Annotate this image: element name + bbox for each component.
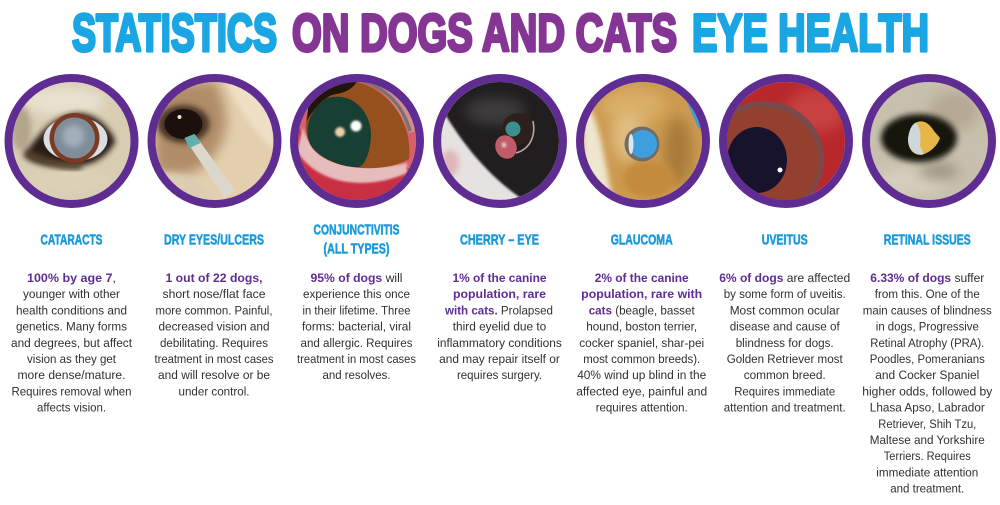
photo: retinal issues eye [866, 78, 992, 204]
text: retinal issues description: in dogs, Progressive [876, 320, 979, 334]
text: dry eyes description: more common. Painful, [156, 303, 272, 317]
text: retinal issues description: Terriers. Requires [884, 449, 971, 463]
column: dry eyes [154, 232, 274, 398]
title [72, 4, 929, 63]
text: cherry eye description: third eyelid due to [453, 320, 546, 334]
text: uveitus description: common breed. [744, 368, 826, 382]
heading: uveitus: UVEITUS [762, 232, 808, 248]
text: cataracts description: affects vision. [37, 401, 106, 415]
text: cataracts description: health conditions and [16, 303, 127, 317]
heading: conjunctivitis: (ALL TYPES) [324, 242, 390, 258]
text: conjunctivitis description: and resolves. [322, 368, 390, 382]
text: uveitus description: disease and cause of [730, 320, 840, 334]
text: glaucoma description: cocker spaniel, shar-pei [579, 336, 704, 350]
text: retinal issues description: Retinal Atrophy (PRA). [870, 336, 984, 350]
text: retinal issues description: higher odds, followed by [862, 384, 993, 398]
text: conjunctivitis description: and allergic. Requires [300, 336, 412, 350]
text: cataracts description: 100% by age 7, [27, 271, 116, 285]
text: cherry eye description: inflammatory conditions [437, 336, 562, 350]
photo: glaucoma eye [580, 78, 706, 204]
text: dry eyes description [154, 271, 274, 398]
text: glaucoma description: cats (beagle, basset [589, 303, 695, 317]
text: cherry eye description: requires surgery. [457, 368, 542, 382]
text: uveitus description: blindness for dogs. [736, 336, 834, 350]
text: dry eyes description: debilitating. Requires [160, 336, 268, 350]
text: retinal issues description: Maltese and Yorkshire [870, 433, 985, 447]
text: cataracts description: more dense/mature. [18, 368, 126, 382]
text: dry eyes description: decreased vision and [158, 320, 270, 334]
text: uveitus description: Golden Retriever most [727, 352, 843, 366]
title: STATISTICS [72, 4, 277, 63]
heading: cherry eye: CHERRY – EYE [460, 232, 539, 248]
photo: uveitis eye [719, 74, 853, 208]
text: glaucoma description: 40% wind up blind in the [577, 368, 706, 382]
text: cherry eye description: with cats. Prolapsed [444, 303, 553, 317]
text: cataracts description: Requires removal when [12, 384, 132, 398]
text: retinal issues description: immediate attention [876, 465, 978, 479]
column: glaucoma [576, 232, 707, 415]
photo: cherry eye [437, 78, 563, 204]
text: cataracts description: and degrees, but affect [11, 336, 133, 350]
heading: cataracts: CATARACTS [40, 232, 103, 248]
text: cataracts description: genetics. Many forms [16, 320, 127, 334]
heading: conjunctivitis [314, 222, 400, 258]
text: dry eyes description: short nose/flat face [162, 287, 266, 301]
text: cherry eye description: population, rare [453, 287, 546, 301]
heading: conjunctivitis: CONJUNCTIVITIS [314, 222, 400, 238]
column: conjunctivitis [297, 222, 416, 382]
text: retinal issues description: from this. One of the [875, 287, 980, 301]
text: retinal issues description [862, 271, 993, 496]
photo: cataracts eye [8, 78, 134, 204]
text: cataracts description: vision as they get [27, 352, 117, 366]
photo: conjunctivitis eye [294, 78, 420, 204]
text: conjunctivitis description: experience this once [303, 287, 410, 301]
heading: glaucoma: GLAUCOMA [611, 232, 673, 248]
text: conjunctivitis description: treatment in most cases [297, 352, 416, 366]
text: glaucoma description: requires attention. [596, 401, 688, 415]
column: uveitus [719, 232, 850, 415]
text: uveitus description: 6% of dogs are affected [719, 271, 850, 285]
text: glaucoma description: 2% of the canine [595, 271, 689, 285]
text: dry eyes description: treatment in most cases [154, 352, 274, 366]
text: glaucoma description: affected eye, painful and [576, 384, 707, 398]
column: cherry eye [437, 232, 562, 382]
heading: dry eyes: DRY EYES/ULCERS [164, 232, 264, 248]
text: retinal issues description: and treatment. [890, 482, 964, 496]
text: cherry eye description [437, 271, 562, 382]
text: cherry eye description: and may repair itself or [439, 352, 560, 366]
text: cherry eye description: 1% of the canine [452, 271, 547, 285]
text: glaucoma description [576, 271, 707, 415]
text: uveitus description: by some form of uveitis. [724, 287, 846, 301]
text: conjunctivitis description: 95% of dogs will [310, 271, 402, 285]
text: dry eyes description: 1 out of 22 dogs, [166, 271, 262, 285]
photo: dry eye test strip [152, 78, 278, 204]
text: retinal issues description: main causes of blindness [863, 303, 992, 317]
text: retinal issues description: Poodles, Pomeranians [870, 352, 985, 366]
text: uveitus description: Most common ocular [730, 303, 840, 317]
text: uveitus description: attention and treatment. [724, 401, 846, 415]
text: retinal issues description: Lhasa Apso, Labrador [870, 401, 985, 415]
text: glaucoma description: population, rare with [581, 287, 702, 301]
text: glaucoma description: hound, boston terrier, [586, 320, 697, 334]
title: ON DOGS AND CATS [292, 4, 677, 63]
column: cataracts [11, 232, 133, 415]
text: cataracts description [11, 271, 133, 415]
text: retinal issues description: Retriever, Shih Tzu, [878, 417, 976, 431]
text: dry eyes description: and will resolve or be [158, 368, 270, 382]
text: uveitus description [719, 271, 850, 415]
text: conjunctivitis description: forms: bacterial, viral [302, 320, 411, 334]
text: retinal issues description: and Cocker Spaniel [875, 368, 979, 382]
text: retinal issues description: 6.33% of dogs suffer [870, 271, 984, 285]
text: conjunctivitis description: in their lifetime. Three [302, 303, 411, 317]
text: cataracts description: younger with other [23, 287, 120, 301]
column: retinal issues [862, 232, 993, 496]
text: conjunctivitis description [297, 271, 416, 382]
text: uveitus description: Requires immediate [734, 384, 835, 398]
text: glaucoma description: most common breeds). [583, 352, 700, 366]
text: dry eyes description: under control. [178, 384, 250, 398]
